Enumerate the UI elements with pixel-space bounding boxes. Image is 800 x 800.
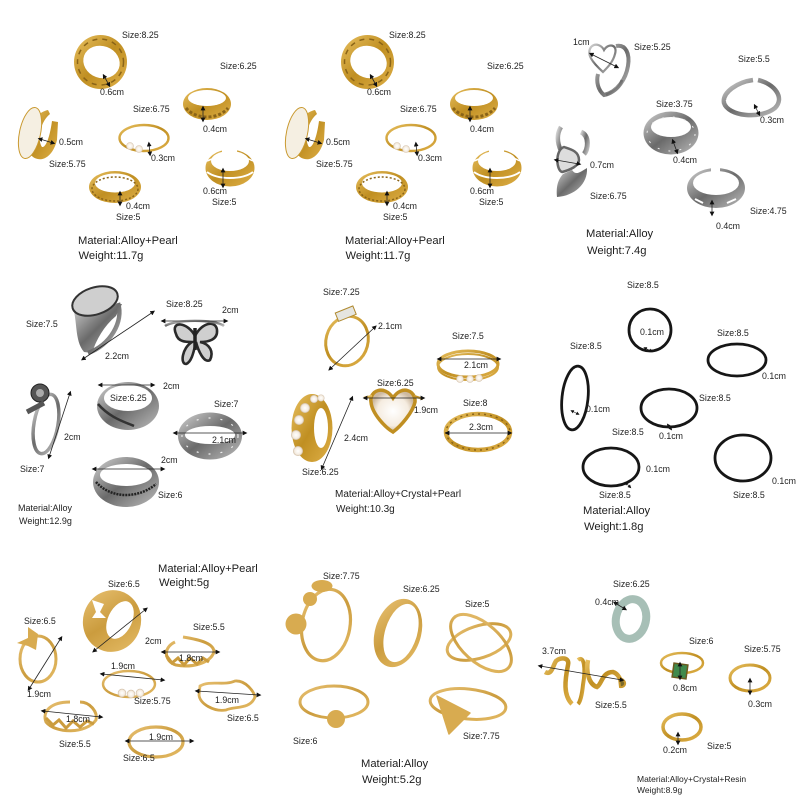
size labels: 2.4cm (344, 433, 368, 443)
ring: snake 5.5 (545, 658, 625, 704)
material and weight (361, 758, 429, 786)
material and weight: Material:Alloy+Crystal+Pearl (335, 489, 461, 500)
size labels: 0.6cm (367, 87, 391, 97)
size labels: Size:7.75 (323, 571, 360, 581)
ring: zigzag open 5.5 (166, 637, 214, 666)
ring: triangle 7.75 (429, 685, 507, 734)
size labels: 2cm (222, 305, 239, 315)
panel: black ring set, middle right (559, 280, 796, 533)
panel: gold and pearl set, top left (14, 30, 257, 262)
size labels: Size:6.25 (487, 61, 524, 71)
ring: chain band 6.25 (183, 88, 231, 120)
material and weight: Material:Alloy (583, 505, 651, 517)
size labels (573, 37, 787, 231)
measure arrows (556, 54, 759, 214)
size labels: Size:8.5 (717, 328, 749, 338)
size labels: 0.5cm (59, 137, 83, 147)
size labels: 0.1cm (640, 327, 664, 337)
ring: baguette crystal 7.25 (320, 306, 374, 371)
ring: wide feather 6 (93, 457, 159, 507)
ring: round disc 6 (300, 686, 368, 728)
size labels: 0.6cm (100, 87, 124, 97)
size labels: 2.2cm (105, 351, 129, 361)
size labels: 0.4cm (673, 155, 697, 165)
size labels: Size:5.75 (744, 644, 781, 654)
ring: slim open band 5.5 (724, 80, 779, 115)
ring: double open band 5 (206, 148, 254, 186)
ring: black 3 (559, 365, 591, 431)
size labels: Size:6.25 (377, 378, 414, 388)
size labels: 2.1cm (378, 321, 402, 331)
size labels: Size:4.75 (750, 206, 787, 216)
material and weight (158, 563, 258, 589)
material and weight (78, 235, 178, 262)
size labels: Size:6.75 (590, 191, 627, 201)
size labels: Size:5 (383, 212, 408, 222)
size labels: 2cm (163, 381, 180, 391)
size labels: 0.4cm (203, 124, 227, 134)
size labels (570, 280, 796, 500)
size labels: Size:5 (707, 741, 732, 751)
material and weight (586, 228, 654, 257)
size labels: 1.9cm (111, 661, 135, 671)
ring: chain link 8.25 (341, 35, 394, 89)
size labels: 1cm (573, 37, 590, 47)
measure arrows (322, 327, 510, 468)
ring: double open band 5 (472, 148, 522, 186)
size labels: Size:5.25 (634, 42, 671, 52)
material and weight: Material:Alloy+Pearl (158, 563, 258, 575)
ring: twisted 6.5 (129, 727, 183, 757)
size labels: 1.8cm (179, 653, 203, 663)
ring: wavy 6.5 (199, 681, 255, 710)
size labels: Size:5.5 (193, 622, 225, 632)
ring: beaded band 5 (89, 171, 141, 203)
ring: heart band 7 (178, 412, 242, 460)
size labels: Size:8.5 (599, 490, 631, 500)
size labels: 1.9cm (414, 405, 438, 415)
material and weight (345, 235, 445, 262)
size labels: 1.8cm (66, 714, 90, 724)
ring: three disc 7.75 (286, 580, 356, 665)
ring: black 2 (708, 344, 766, 376)
material and weight (637, 774, 746, 795)
ring: feather top 6.25 (97, 382, 159, 430)
size labels: Size:6.5 (108, 579, 140, 589)
ring: black 5 (583, 448, 639, 486)
size labels: Size:8.25 (389, 30, 426, 40)
ring: butterfly 8.25 (165, 321, 224, 364)
size labels: Size:8.25 (122, 30, 159, 40)
size labels: Size:5 (116, 212, 141, 222)
material and weight: Weight:8.9g (637, 785, 682, 795)
size labels: Size:5 (479, 197, 504, 207)
size labels: 0.7cm (590, 160, 614, 170)
ring: pearl 6.75 (386, 125, 436, 153)
size labels: Size:5 (212, 197, 237, 207)
material and weight (583, 505, 651, 533)
size labels: Size:7 (214, 399, 239, 409)
size labels: Size:7.5 (452, 331, 484, 341)
ring: open heart 5.25 (589, 45, 628, 95)
material and weight (335, 489, 461, 515)
measure arrows (29, 609, 259, 741)
size labels (302, 287, 493, 477)
ring: etched open band 4.75 (687, 166, 745, 208)
panel: silver heart set, top right (556, 37, 787, 257)
material and weight: Weight:7.4g (587, 245, 646, 257)
material and weight: Material:Alloy (18, 503, 73, 513)
size labels: Size:8.25 (166, 299, 203, 309)
size labels: Size:8.5 (570, 341, 602, 351)
size labels: 0.4cm (393, 201, 417, 211)
material and weight: Weight:1.8g (584, 521, 644, 533)
size labels: 0.8cm (673, 683, 697, 693)
ring: slim 5.75 (730, 665, 770, 691)
ring: heart signet 7.5 (68, 281, 122, 353)
size labels: 0.6cm (203, 186, 227, 196)
size labels: 0.1cm (762, 371, 786, 381)
material and weight: Weight:11.7g (78, 250, 143, 262)
size labels: Size:5.75 (49, 159, 86, 169)
size labels: 0.1cm (772, 476, 796, 486)
measure arrows (40, 76, 223, 204)
measure arrows (572, 348, 671, 487)
size labels: 1.9cm (149, 732, 173, 742)
size labels: Size:3.75 (656, 99, 693, 109)
panel: gold butterfly set, bottom left (17, 563, 259, 763)
size labels: Size:6.5 (227, 713, 259, 723)
size labels (20, 299, 239, 500)
measure arrows (307, 76, 490, 204)
ring: zigzag open 5.5 lower (45, 702, 96, 731)
size labels: Size:6.25 (302, 467, 339, 477)
ring: rose 7 (27, 384, 63, 456)
size labels: Size:6 (293, 736, 318, 746)
ring: white enamel 5.75 (14, 105, 58, 161)
size labels: 3.7cm (542, 646, 566, 656)
size labels: 0.3cm (748, 699, 772, 709)
size labels: 1.9cm (215, 695, 239, 705)
size labels: Size:5.75 (316, 159, 353, 169)
size labels: 1.9cm (27, 689, 51, 699)
material and weight: Material:Alloy (586, 228, 654, 240)
ring: heart pearl 6.25 (364, 390, 423, 432)
ring: chain link 8.25 (74, 35, 127, 89)
size labels: Size:5.75 (134, 696, 171, 706)
panel: antique silver set, middle left (18, 281, 245, 526)
size labels: Size:7.75 (463, 731, 500, 741)
size labels: 2.1cm (464, 360, 488, 370)
ring: three pearl 5.75 (103, 671, 155, 698)
size labels: Size:5 (465, 599, 490, 609)
size labels: Size:6.5 (123, 753, 155, 763)
size labels: 2.3cm (469, 422, 493, 432)
size labels: 0.1cm (646, 464, 670, 474)
ring: wide butterfly band 6.5 (76, 584, 148, 658)
ring: pearl 6.75 (120, 125, 168, 153)
material and weight (18, 503, 73, 526)
ring: white enamel 5.75 (281, 105, 325, 161)
size labels: Size:6.75 (400, 104, 437, 114)
material and weight: Weight:11.7g (346, 250, 410, 262)
size labels: 0.2cm (663, 745, 687, 755)
size labels (24, 579, 259, 763)
ring: butterfly 6.5 (17, 627, 56, 682)
material and weight: Material:Alloy+Crystal+Resin (637, 774, 746, 784)
size labels: 0.4cm (595, 597, 619, 607)
panel: gold crystal and pearl set, middle (291, 287, 510, 515)
size labels: Size:6.75 (133, 104, 170, 114)
size labels (49, 30, 257, 222)
size labels: Size:5.5 (59, 739, 91, 749)
size labels: 0.6cm (470, 186, 494, 196)
size labels: Size:8.5 (733, 490, 765, 500)
size labels: Size:8.5 (612, 427, 644, 437)
size labels: Size:5.5 (738, 54, 770, 64)
panel: snake and resin set, bottom right (540, 579, 781, 795)
size labels: Size:8 (463, 398, 488, 408)
measure arrows (49, 312, 245, 469)
size labels: 0.3cm (760, 115, 784, 125)
size labels: 0.1cm (586, 404, 610, 414)
ring: resin 6.25 (612, 596, 650, 642)
size labels: Size:7.25 (323, 287, 360, 297)
ring: black 1 (629, 309, 671, 351)
size labels: Size:6 (689, 636, 714, 646)
ring: green stone 6 (661, 653, 703, 679)
ring: three pearl 7.5 (438, 351, 498, 383)
size labels: Size:7 (20, 464, 45, 474)
size labels: 0.4cm (716, 221, 740, 231)
size labels: 0.5cm (326, 137, 350, 147)
size labels: 2.1cm (212, 435, 236, 445)
ring: pearl eternity 6.25 (291, 394, 332, 462)
ring: heart with band 6.75 (557, 127, 587, 197)
material and weight: Weight:5g (159, 577, 209, 589)
size labels: 0.3cm (151, 153, 175, 163)
material and weight: Weight:12.9g (19, 516, 72, 526)
ring: twisted rope 8 (446, 414, 510, 450)
material and weight: Weight:10.3g (336, 504, 395, 515)
measure arrows (540, 603, 750, 743)
ring: heart band 3.75 (644, 112, 698, 154)
size labels: 0.4cm (126, 201, 150, 211)
ring: crossed 5 (441, 604, 521, 682)
size labels: Size:6 (158, 490, 183, 500)
ring: plain band 6.25 (366, 593, 430, 673)
panel: gold and pearl set, top middle (281, 30, 524, 262)
ring: beaded band 5 (356, 171, 408, 203)
size labels: Size:6.25 (613, 579, 650, 589)
material and weight: Material:Alloy+Pearl (78, 235, 178, 247)
size labels: Size:6.25 (220, 61, 257, 71)
ring: slim 5 (663, 714, 701, 740)
material and weight: Weight:5.2g (362, 774, 422, 786)
material and weight: Material:Alloy (361, 758, 429, 770)
ring: black 6 (715, 435, 771, 481)
size labels: Size:7.5 (26, 319, 58, 329)
panel: minimal gold set, bottom middle (286, 571, 521, 786)
size labels: Size:5.5 (595, 700, 627, 710)
ring: chain band 6.25 (450, 88, 498, 120)
size labels: 0.3cm (418, 153, 442, 163)
size labels: 0.4cm (470, 124, 494, 134)
size labels: Size:8.5 (627, 280, 659, 290)
size labels: 2cm (64, 432, 81, 442)
ring: black 4 (641, 389, 697, 427)
material and weight: Material:Alloy+Pearl (345, 235, 445, 247)
size labels: 2cm (161, 455, 178, 465)
size labels (293, 571, 500, 746)
size labels: 2cm (145, 636, 162, 646)
size labels (542, 579, 781, 755)
size labels: Size:6.25 (403, 584, 440, 594)
size labels: Size:6.5 (24, 616, 56, 626)
size labels: 0.1cm (659, 431, 683, 441)
size labels: Size:8.5 (699, 393, 731, 403)
size labels: Size:6.25 (110, 393, 147, 403)
size labels (316, 30, 524, 222)
